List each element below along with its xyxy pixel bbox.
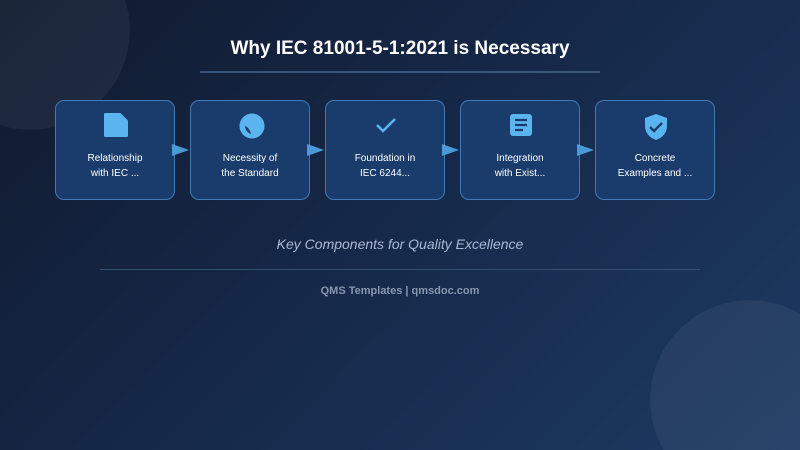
- card 4: Integration: [496, 153, 544, 164]
- card 2: Necessity of: [223, 153, 277, 164]
- icon: globe: [240, 114, 264, 138]
- card 4: [460, 100, 580, 200]
- card 2: the Standard: [221, 168, 279, 179]
- card 5: [595, 100, 715, 200]
- arrow 3: [442, 144, 459, 156]
- icon: shield: [645, 114, 667, 140]
- footer: QMS Templates | qmsdoc.com: [321, 285, 479, 297]
- arrow 2: [307, 144, 324, 156]
- card 3: IEC 6244...: [360, 168, 410, 179]
- subtitle: Key Components for Quality Excellence: [277, 236, 523, 252]
- card 3: Foundation in: [355, 153, 415, 164]
- card 1: [55, 100, 175, 200]
- arrow 4: [577, 144, 594, 156]
- arrow 1: [172, 144, 189, 156]
- card 5: Concrete: [635, 153, 675, 164]
- card 5: Examples and ...: [618, 168, 692, 179]
- card 3: [325, 100, 445, 200]
- icon: document: [104, 113, 128, 137]
- card 4: with Exist...: [495, 168, 545, 179]
- icon: check: [376, 118, 396, 133]
- card 1: Relationship: [87, 153, 143, 164]
- title: Why IEC 81001-5-1:2021 is Necessary: [230, 38, 570, 59]
- card 1: with IEC ...: [91, 168, 139, 179]
- card 2: [190, 100, 310, 200]
- icon: list: [510, 114, 532, 136]
